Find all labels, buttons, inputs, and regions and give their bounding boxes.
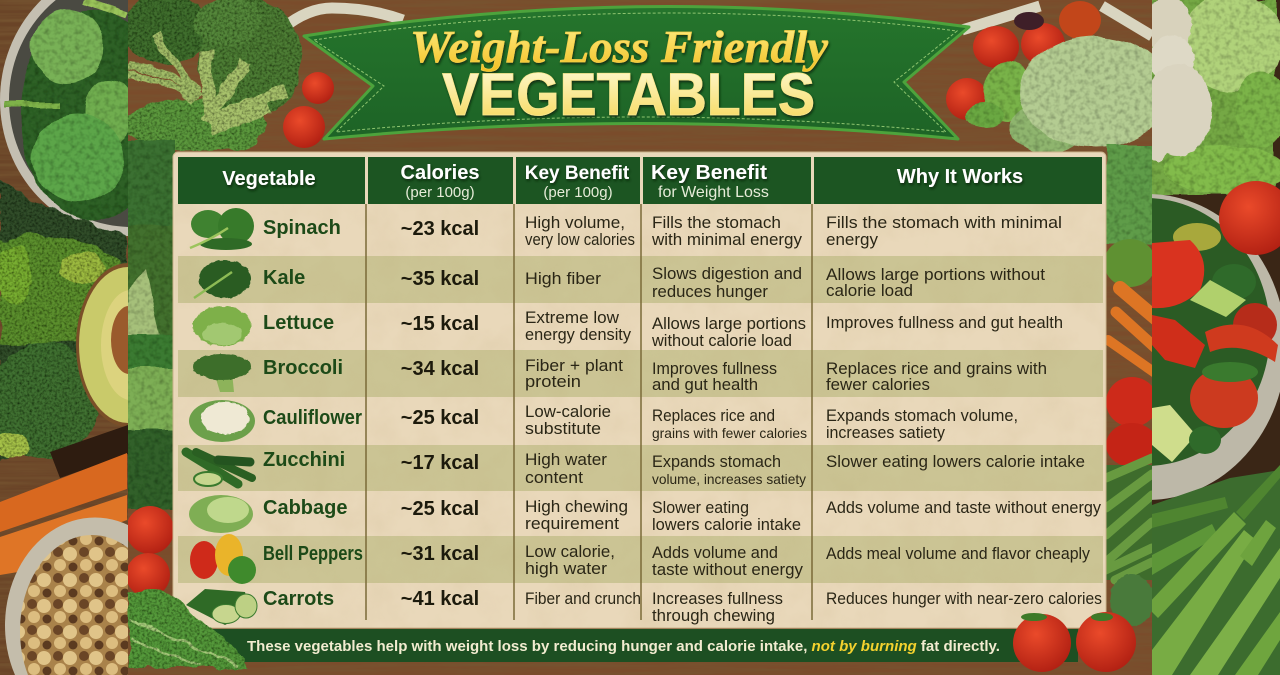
icon: lettuce: [193, 306, 251, 346]
icon: cabbage: [189, 495, 253, 533]
carrots: [0, 453, 127, 575]
row: Carrots: through chewing: [652, 607, 775, 625]
row: Carrots: Fiber and crunch: [525, 590, 641, 608]
row: Bell Peppers: ~31 kcal: [401, 543, 479, 565]
beans and herbs right of table: [1106, 454, 1152, 626]
icon: spinach: [190, 208, 254, 250]
row: Kale: High fiber: [525, 270, 602, 288]
row: Zucchini: volume, increases satiety: [652, 471, 806, 487]
row: Bell Peppers: Low calorie,: [525, 543, 615, 561]
icon: zucchini: [186, 452, 252, 486]
row: Kale: [194, 260, 1045, 301]
ribbon shape: [304, 7, 969, 139]
row: Spinach: Fills the stomach: [652, 214, 781, 232]
tomatoes lower left: [126, 506, 174, 554]
row: Cabbage: Adds volume and taste without energy: [826, 499, 1102, 517]
row: Kale: calorie load: [826, 282, 913, 300]
row: Carrots: [186, 588, 1102, 625]
row: Cauliflower: Replaces rice and: [652, 407, 775, 425]
row: Kale: Allows large portions without: [826, 266, 1045, 284]
tomatoes at footer: [1013, 612, 1136, 672]
cauliflower: [1152, 0, 1212, 162]
inner left strip of greens: [128, 140, 175, 594]
green beans: [1146, 465, 1280, 675]
header row: Key Benefit: [525, 163, 630, 184]
row: Zucchini: [186, 449, 1085, 487]
row: Cauliflower: Cauliflower: [263, 407, 362, 429]
red bell pepper: [1106, 377, 1152, 465]
row: Bell Peppers: high water: [525, 560, 608, 578]
row: Kale: ~35 kcal: [401, 268, 479, 290]
tomatoes top right: [946, 1, 1101, 120]
row: Broccoli: Replaces rice and grains with: [826, 360, 1047, 378]
row: Lettuce: without calorie load: [651, 332, 792, 350]
header row: Key Benefit: [651, 162, 767, 184]
row: Kale: Slows digestion and: [652, 265, 802, 283]
row: Cauliflower: [189, 400, 1018, 442]
row: Zucchini: Zucchini: [263, 449, 345, 471]
row: Zucchini: content: [525, 469, 583, 487]
row: Broccoli: Improves fullness: [652, 360, 777, 378]
row: Broccoli: ~34 kcal: [401, 358, 479, 380]
paper mottling: [175, 204, 1105, 628]
row: Zucchini: High water: [525, 451, 608, 469]
row: Kale: Kale: [263, 267, 305, 289]
row: Cabbage: lowers calorie intake: [652, 516, 801, 534]
row: Lettuce: [193, 306, 1063, 350]
footer note bar: These vegetables help with weight loss by reducing hunger and calorie intake, not by burning fat directly.: [247, 638, 1000, 655]
spinach bowl: [0, 0, 128, 236]
header row: (per 100g): [405, 184, 475, 201]
footer note bar: [198, 629, 1078, 662]
row: Cabbage: Cabbage: [263, 497, 347, 519]
row: Bell Peppers: [190, 534, 1091, 584]
title banner: [304, 7, 969, 139]
row: Carrots: Reduces hunger with near-zero calories: [826, 590, 1102, 608]
row: Broccoli: and gut health: [652, 376, 758, 394]
row: Cauliflower: substitute: [525, 420, 601, 438]
row: Spinach: with minimal energy: [651, 231, 803, 249]
photo strip: left vegetables: [0, 0, 128, 675]
avocado: [76, 263, 128, 426]
lettuce: [1145, 0, 1280, 195]
header row: for Weight Loss: [658, 184, 769, 201]
row: Spinach: ~23 kcal: [401, 218, 479, 240]
row: Carrots: ~41 kcal: [401, 588, 479, 610]
header row: Vegetable: [222, 168, 316, 190]
header row: Calories: [401, 162, 479, 184]
row: Broccoli: protein: [525, 373, 581, 391]
row: Cauliflower: increases satiety: [826, 424, 946, 442]
title line one: Weight-Loss Friendly: [410, 21, 829, 72]
broccoli and greens at top left: [123, 0, 302, 151]
row: Cauliflower: Expands stomach volume,: [826, 407, 1018, 425]
row: Bell Peppers: Adds volume and: [652, 544, 778, 562]
row: Bell Peppers: Bell Peppers: [263, 543, 363, 565]
row: Carrots: Carrots: [263, 588, 334, 610]
row: Spinach: Fills the stomach with minimal: [826, 214, 1062, 232]
cabbage, tomatoes and produce right of table: [946, 1, 1170, 626]
salad bowl: [1152, 194, 1280, 500]
row: Broccoli: Fiber + plant: [525, 357, 623, 375]
tomato: [1219, 181, 1280, 255]
comparison table: [173, 152, 1106, 628]
row: Spinach: [190, 208, 1062, 250]
header row: [178, 157, 1102, 204]
herbs lower left: [128, 591, 250, 668]
header row: (per 100g): [543, 184, 613, 201]
row: Cabbage: Slower eating: [652, 499, 749, 517]
row: Cauliflower: ~25 kcal: [401, 407, 479, 429]
row: Spinach: Spinach: [263, 217, 341, 239]
cabbage: [967, 36, 1170, 245]
tomatoes left of banner: [283, 72, 334, 148]
carrots: [1108, 288, 1160, 375]
row: Bell Peppers: taste without energy: [652, 561, 804, 579]
header row: Why It Works: [897, 166, 1023, 188]
title line two: VEGETABLES: [442, 61, 815, 128]
row: Cabbage: requirement: [525, 515, 619, 533]
row: Spinach: energy: [826, 231, 879, 249]
row: Carrots: Increases fullness: [652, 590, 783, 608]
icon: cauliflower: [189, 400, 255, 442]
row: Cabbage: ~25 kcal: [401, 498, 479, 520]
row: Bell Peppers: Adds meal volume and flavor cheaply: [826, 545, 1091, 563]
dark gap under broccoli: [50, 425, 128, 478]
icon: broccoli: [193, 354, 251, 392]
avocado: [1106, 239, 1152, 287]
row: Cauliflower: Low-calorie: [525, 403, 611, 421]
row: Lettuce: Extreme low: [525, 309, 619, 327]
row: Lettuce: Allows large portions: [652, 315, 806, 333]
row: Spinach: very low calories: [525, 231, 635, 249]
row: Zucchini: Expands stomach: [652, 453, 781, 471]
row: Zucchini: ~17 kcal: [401, 452, 479, 474]
row: Lettuce: Lettuce: [263, 312, 334, 334]
measuring tape: [283, 6, 1152, 36]
row: Cauliflower: grains with fewer calories: [652, 425, 807, 441]
icon: kale: [194, 260, 251, 298]
ribbon stitching: [314, 13, 957, 132]
lentil bowl: [5, 518, 128, 675]
row: Cabbage: [189, 495, 1102, 534]
row: Broccoli: fewer calories: [826, 376, 930, 394]
row: Broccoli: [193, 354, 1047, 394]
row: Broccoli: Broccoli: [263, 357, 343, 379]
row: Zucchini: Slower eating lowers calorie intake: [826, 453, 1085, 471]
row: Lettuce: ~15 kcal: [401, 313, 479, 335]
table card: [173, 152, 1106, 628]
row: Lettuce: Improves fullness and gut health: [826, 314, 1063, 332]
column dividers: [366, 204, 812, 620]
row: Cabbage: High chewing: [525, 498, 628, 516]
alternating row bands: [178, 256, 1103, 583]
icon: bell peppers: [190, 534, 256, 584]
row: Spinach: High volume,: [525, 214, 625, 232]
photo strip: right vegetables: [1152, 0, 1280, 675]
broccoli heap: [0, 180, 127, 460]
row: Kale: reduces hunger: [652, 283, 769, 301]
icon: cucumber slices: [186, 589, 257, 625]
row: Lettuce: energy density: [525, 326, 632, 344]
